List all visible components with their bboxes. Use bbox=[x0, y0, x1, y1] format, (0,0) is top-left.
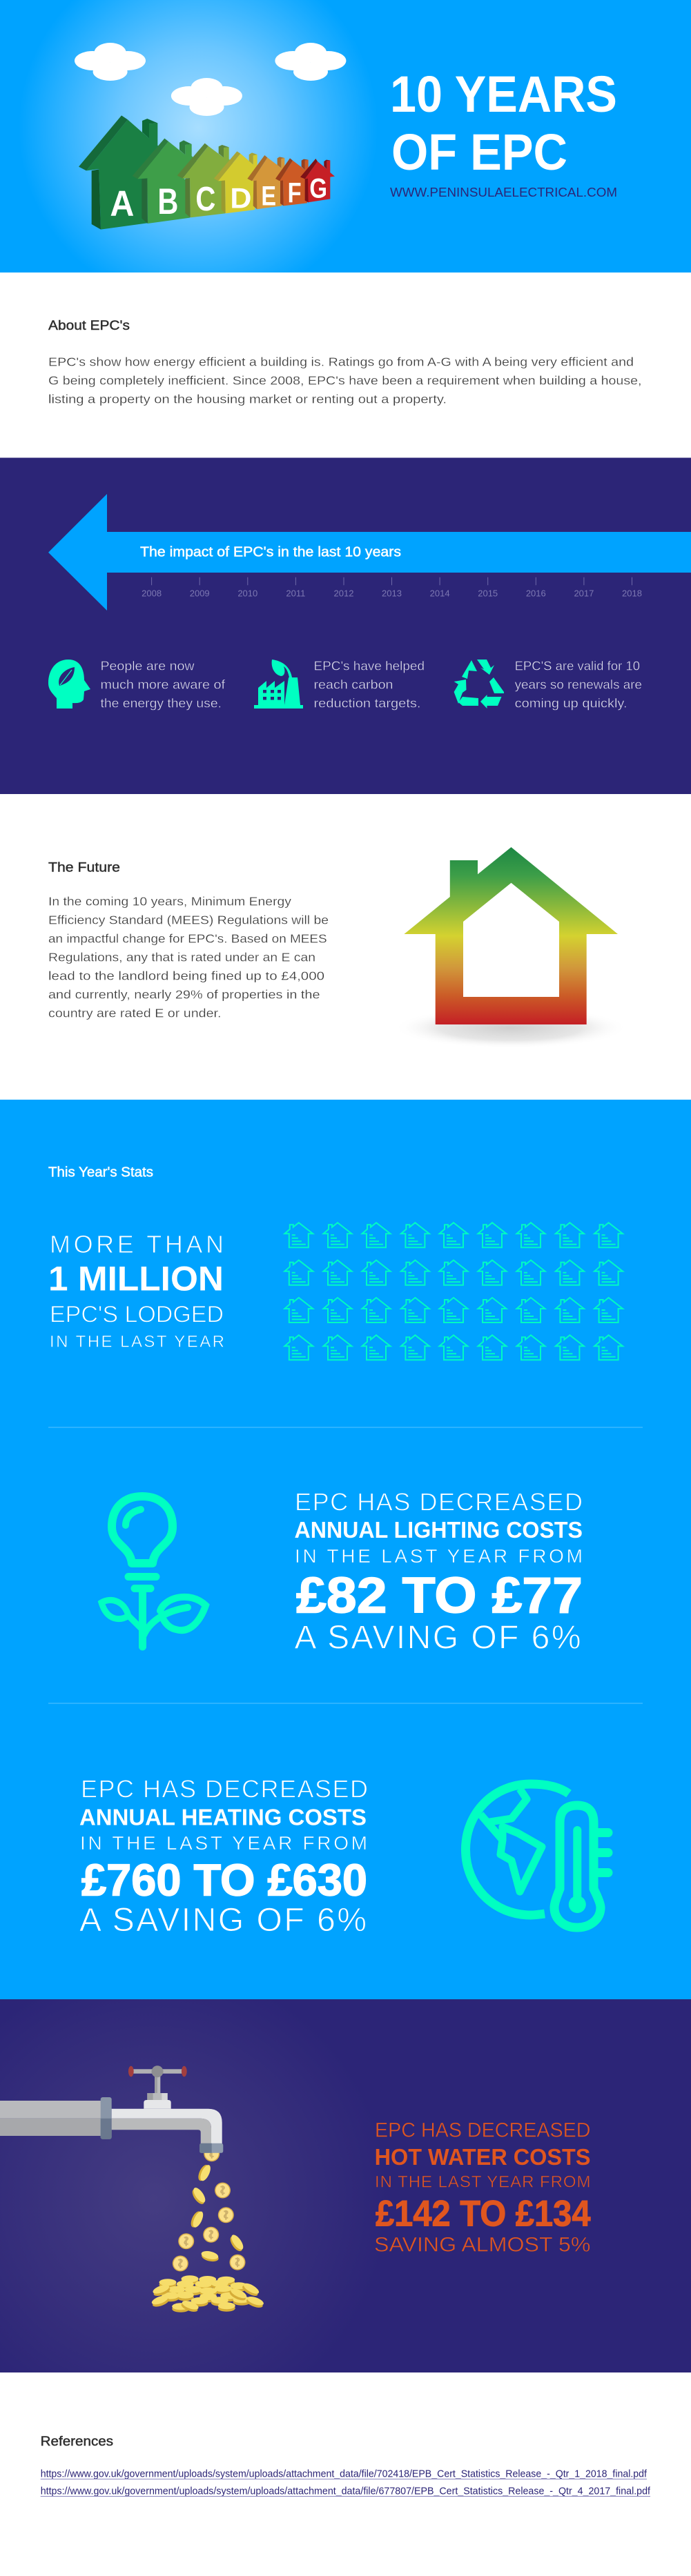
icon: globe with thermometer bbox=[465, 1784, 608, 1928]
stat: lighting costs: £82 TO £77 bbox=[296, 1567, 583, 1623]
heading: About EPC's bbox=[48, 318, 130, 333]
illustration: falling coins bbox=[173, 2146, 246, 2271]
body text bbox=[48, 895, 329, 1020]
stat: heating costs: A SAVING OF 6% bbox=[79, 1902, 367, 1939]
icon: EPC rating houses A to G: F bbox=[288, 177, 302, 208]
body text: EPC's show how energy efficient a building is. Ratings go from A-G with A being very efficient and bbox=[48, 355, 634, 369]
heading: The Future bbox=[48, 860, 120, 875]
title bbox=[390, 66, 617, 181]
body text bbox=[48, 355, 642, 406]
reference link 1: https://www.gov.uk/government/uploads/system/uploads/attachment_data/file/702418/EPB_Cert_Statistics_Release_-_Qtr_1_2018_final.pdf bbox=[41, 2469, 648, 2480]
heading: References bbox=[41, 2434, 113, 2449]
stat: lighting costs: A SAVING OF 6% bbox=[294, 1619, 581, 1656]
website url: WWW.PENINSULAELECTRICAL.COM bbox=[390, 186, 617, 199]
stat: heating costs: ANNUAL HEATING COSTS bbox=[79, 1805, 367, 1830]
stat: lighting costs bbox=[294, 1487, 583, 1656]
body text: In the coming 10 years, Minimum Energy bbox=[48, 895, 291, 909]
text: awareness: People are now bbox=[101, 660, 195, 673]
icon: recycle arrows bbox=[454, 660, 504, 709]
icon: EPC rating houses A to G: C bbox=[195, 181, 215, 218]
icon: head with leaf bbox=[48, 660, 90, 709]
title: 10 YEARS bbox=[390, 66, 617, 123]
stat: hot water costs: IN THE LAST YEAR FROM bbox=[375, 2172, 591, 2191]
stat: hot water costs: HOT WATER COSTS bbox=[375, 2144, 591, 2170]
body text: country are rated E or under. bbox=[48, 1007, 221, 1020]
stat: hot water costs: EPC HAS DECREASED bbox=[375, 2119, 591, 2142]
icon: EPC rating houses A to G bbox=[79, 115, 335, 230]
stat: heating costs: EPC HAS DECREASED bbox=[81, 1775, 368, 1803]
timeline 2008 to 2018: 2011 bbox=[286, 588, 305, 598]
panel: about EPCs bbox=[48, 318, 642, 406]
body text: listing a property on the housing market or renting out a property. bbox=[48, 393, 447, 406]
body text: Regulations, any that is rated under an E can bbox=[48, 951, 315, 964]
timeline 2008 to 2018: 2014 bbox=[430, 588, 450, 598]
timeline 2008 to 2018: 2008 bbox=[142, 588, 162, 598]
stat: heating costs: £760 TO £630 bbox=[81, 1854, 367, 1905]
timeline 2008 to 2018: 2018 bbox=[622, 588, 642, 598]
stat: hot water costs bbox=[374, 2119, 591, 2257]
stat: heating costs: IN THE LAST YEAR FROM bbox=[80, 1832, 367, 1854]
text: awareness bbox=[101, 660, 226, 711]
icon: light bulb with leaves bbox=[101, 1496, 206, 1647]
illustration: tap bbox=[0, 2065, 223, 2153]
stat: lighting costs: EPC HAS DECREASED bbox=[295, 1487, 583, 1516]
title: OF EPC bbox=[391, 123, 567, 181]
panel: hot water costs bbox=[0, 1999, 691, 2372]
panel: this year's stats bbox=[0, 1100, 691, 1999]
text: renewals bbox=[515, 660, 642, 711]
body text: an impactful change for EPC's. Based on MEES bbox=[48, 932, 327, 946]
banner heading: The impact of EPC's in the last 10 years bbox=[140, 545, 401, 560]
icon: gradient house with shadow bbox=[393, 847, 628, 1049]
icon grid: houses bbox=[284, 1222, 623, 1360]
stat: hot water costs: SAVING ALMOST 5% bbox=[374, 2234, 591, 2257]
icon: factory with leaf bbox=[254, 660, 303, 709]
stat: one million lodged: EPC'S LODGED bbox=[50, 1302, 224, 1328]
icon: clouds bbox=[75, 43, 346, 116]
stat: one million lodged: 1 MILLION bbox=[48, 1260, 224, 1298]
text: renewals: years so renewals are bbox=[515, 678, 642, 692]
arrow banner bbox=[48, 494, 691, 611]
panel: impact of EPCs bbox=[0, 458, 691, 794]
stat: heating costs bbox=[79, 1775, 368, 1939]
icon: EPC rating houses A to G: E bbox=[261, 181, 276, 211]
panel: hero bbox=[0, 0, 691, 273]
timeline 2008 to 2018: 2017 bbox=[574, 588, 594, 598]
timeline 2008 to 2018: 2015 bbox=[478, 588, 498, 598]
heading: This Year's Stats bbox=[48, 1165, 153, 1180]
body text: Efficiency Standard (MEES) Regulations will be bbox=[48, 913, 329, 927]
panel: references bbox=[41, 2434, 651, 2497]
text: awareness: much more aware of bbox=[101, 678, 226, 692]
timeline 2008 to 2018: 2012 bbox=[334, 588, 353, 598]
stat: one million lodged: MORE THAN bbox=[50, 1230, 224, 1258]
stat: lighting costs: ANNUAL LIGHTING COSTS bbox=[294, 1517, 583, 1543]
stat: lighting costs: IN THE LAST YEAR FROM bbox=[295, 1545, 583, 1567]
reference link 2: https://www.gov.uk/government/uploads/system/uploads/attachment_data/file/677807/EPB_Cert_Statistics_Release_-_Qtr_4_2017_final.pdf bbox=[41, 2486, 651, 2497]
icon: EPC rating houses A to G: G bbox=[309, 174, 327, 204]
timeline 2008 to 2018: 2013 bbox=[382, 588, 402, 598]
illustration: coin pile bbox=[150, 2275, 264, 2314]
stat: hot water costs: £142 TO £134 bbox=[376, 2194, 591, 2235]
text: carbon targets: reduction targets. bbox=[313, 697, 421, 711]
timeline 2008 to 2018 bbox=[142, 577, 642, 598]
text: awareness: the energy they use. bbox=[101, 697, 222, 711]
timeline 2008 to 2018: 2016 bbox=[526, 588, 546, 598]
body text: and currently, nearly 29% of properties in the bbox=[48, 988, 320, 1002]
text: renewals: EPC'S are valid for 10 bbox=[515, 660, 640, 673]
icon: EPC rating houses A to G: D bbox=[230, 182, 251, 215]
text: carbon targets: reach carbon bbox=[313, 678, 393, 692]
text: renewals: coming up quickly. bbox=[515, 697, 627, 711]
panel: the future bbox=[48, 847, 628, 1049]
body text: G being completely inefficient. Since 2008, EPC's have been a requirement when building a house, bbox=[48, 374, 642, 388]
timeline 2008 to 2018: 2010 bbox=[237, 588, 257, 598]
stat: one million lodged bbox=[48, 1230, 224, 1351]
stat: one million lodged: IN THE LAST YEAR bbox=[50, 1333, 224, 1351]
text: carbon targets bbox=[313, 660, 425, 711]
body text: lead to the landlord being fined up to £4,000 bbox=[48, 969, 324, 983]
icon: EPC rating houses A to G: A bbox=[110, 184, 134, 224]
text: carbon targets: EPC's have helped bbox=[313, 660, 425, 673]
timeline 2008 to 2018: 2009 bbox=[190, 588, 210, 598]
icon: EPC rating houses A to G: B bbox=[157, 181, 178, 222]
